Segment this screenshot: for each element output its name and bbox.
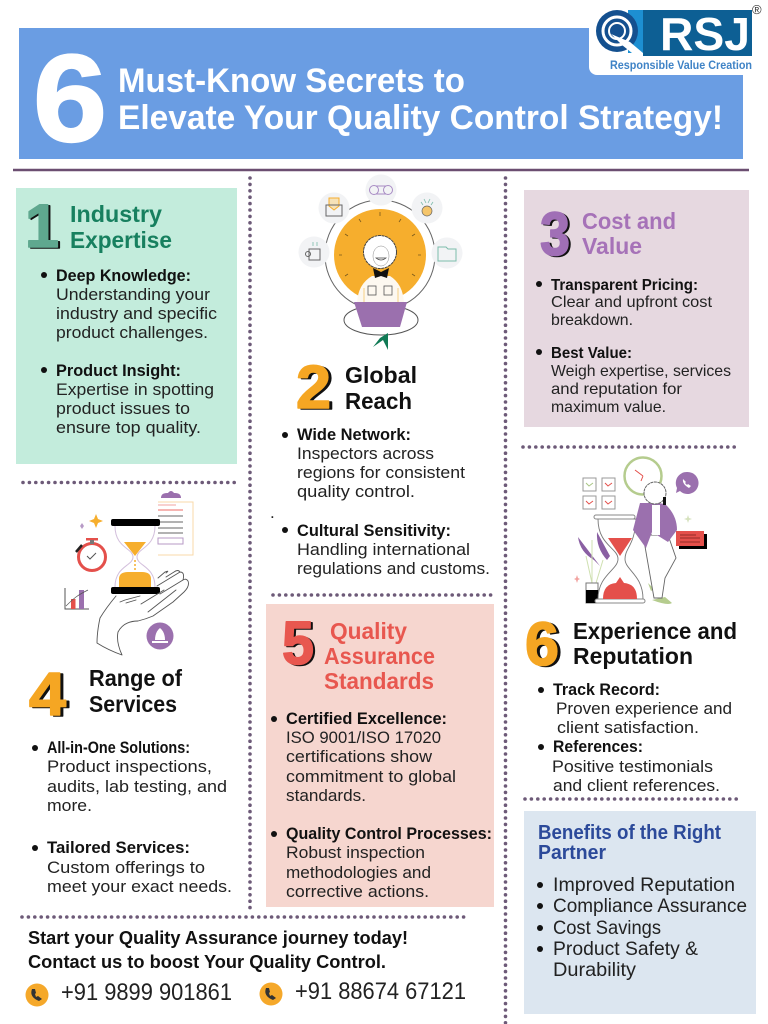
phone number 1: +91 9899 901861 <box>61 979 232 1006</box>
bullet list: methodologies and <box>286 863 431 882</box>
heading: benefits: Benefits of the Right <box>538 822 721 844</box>
benefits list: Product Safety & <box>553 938 698 960</box>
logo: RSJ: RSJ <box>660 8 750 60</box>
bullet list: Robust inspection <box>286 843 425 862</box>
logo: RSJ <box>589 2 768 75</box>
bullet list: industry and specific <box>56 304 218 323</box>
heading: cost and value <box>582 208 676 259</box>
bullet list: ISO 9001/ISO 17020 <box>286 728 441 747</box>
illustration: hourglass on open hand <box>65 491 193 655</box>
heading: cost and value: Value <box>582 233 642 259</box>
bullet list: more. <box>47 796 92 815</box>
title <box>118 62 723 137</box>
bullet list: Positive testimonials <box>552 757 713 776</box>
icon: phone 2 <box>260 982 282 1006</box>
bullet list: Proven experience and <box>556 699 732 718</box>
title: Elevate Your Quality Control Strategy! <box>118 99 723 137</box>
heading: industry expertise <box>70 201 172 253</box>
heading: global reach <box>345 362 417 414</box>
benefits list: Improved Reputation <box>553 874 735 896</box>
benefits list: Compliance Assurance <box>553 895 747 917</box>
benefits list: Durability <box>553 959 636 981</box>
heading: benefits: Partner <box>538 842 606 864</box>
bullet list: . <box>270 503 275 522</box>
heading: quality assurance standards: Quality <box>330 618 407 644</box>
bullet list: Certified Excellence: <box>286 710 447 728</box>
number 6: 6 <box>525 610 559 678</box>
benefits list: Cost Savings <box>553 917 661 939</box>
bullet list: Custom offerings to <box>47 858 205 877</box>
bullet list: maximum value. <box>551 399 666 416</box>
bullet list: breakdown. <box>551 312 633 329</box>
bullet list: References: <box>553 738 643 756</box>
heading: experience and reputation <box>573 618 737 669</box>
bullet list: standards. <box>286 786 366 805</box>
icon: phone 1 <box>26 984 48 1006</box>
number 6: 6 <box>528 611 562 679</box>
bullet list: client satisfaction. <box>557 718 699 737</box>
bullet list: Product inspections, <box>47 757 212 776</box>
header banner <box>19 28 743 168</box>
bullet list <box>32 739 232 896</box>
benefits list <box>537 874 747 981</box>
bullet list <box>271 710 492 901</box>
bullet list: Weigh expertise, services <box>551 363 731 380</box>
call to action text: Start your Quality Assurance journey today! <box>28 927 408 948</box>
heading: experience and reputation: Experience and <box>573 618 737 644</box>
bullet list: and reputation for <box>551 381 683 398</box>
bullet list: audits, lab testing, and <box>47 777 227 796</box>
bullet list: Inspectors across <box>297 444 434 463</box>
bullet list: product issues to <box>56 399 190 418</box>
number 4: 4 <box>29 660 66 728</box>
bullet list <box>536 277 731 416</box>
bullet list: ensure top quality. <box>56 418 201 437</box>
heading: quality assurance standards: Assurance <box>324 643 435 669</box>
panel: 2 global reach <box>270 353 490 578</box>
phone number 2: +91 88674 67121 <box>295 978 466 1005</box>
bullet list: Quality Control Processes: <box>286 825 492 843</box>
bullet list: Cultural Sensitivity: <box>297 522 451 540</box>
bullet list: Track Record: <box>553 681 660 699</box>
panel: benefits of the right partner <box>524 811 756 1014</box>
heading: experience and reputation: Reputation <box>573 643 693 669</box>
panel: 1 industry expertise <box>16 188 237 464</box>
illustration: person on phone beside hourglass <box>574 458 707 604</box>
heading: range of services: Range of <box>89 665 182 691</box>
number 4: 4 <box>32 661 69 729</box>
number 5: 5 <box>284 610 316 678</box>
bullet list: quality control. <box>297 482 415 501</box>
bullet list <box>41 267 218 437</box>
heading: benefits <box>538 822 721 864</box>
number 1: 1 <box>25 192 59 260</box>
logo: RSJ: Responsible Value Creation <box>610 60 752 72</box>
bullet list <box>270 426 490 578</box>
number 5: 5 <box>282 609 314 677</box>
bullet list: Handling international <box>297 540 470 559</box>
bullet list: regions for consistent <box>297 463 465 482</box>
bullet list: Tailored Services: <box>47 839 190 857</box>
bullet list: Clear and upfront cost <box>551 294 713 311</box>
logo: RSJ: ® <box>752 2 762 17</box>
panel: 5 quality assurance standards <box>266 604 494 907</box>
bullet list: product challenges. <box>56 323 208 342</box>
heading: global reach: Global <box>345 362 417 388</box>
bullet list: commitment to global <box>286 767 456 786</box>
bullet list: corrective actions. <box>286 882 429 901</box>
illustration: person with laptop and sun clock <box>298 174 462 350</box>
call to action text <box>28 927 408 972</box>
bullet list: Deep Knowledge: <box>56 267 191 285</box>
bullet list: regulations and customs. <box>297 559 490 578</box>
heading: quality assurance standards <box>324 618 435 694</box>
number 2: 2 <box>296 353 331 421</box>
heading: industry expertise: Industry <box>70 201 162 227</box>
panel: 4 range of services <box>29 660 232 896</box>
heading: range of services: Services <box>89 691 177 717</box>
title: Must-Know Secrets to <box>118 62 465 100</box>
number 1: 1 <box>27 193 61 261</box>
heading: cost and value: Cost and <box>582 208 676 234</box>
panel: 3 cost and value <box>524 190 749 427</box>
bullet list: Expertise in spotting <box>56 380 214 399</box>
bullet list: Transparent Pricing: <box>551 277 698 294</box>
heading: industry expertise: Expertise <box>70 227 172 253</box>
number 3: 3 <box>540 200 570 268</box>
bullet list: All-in-One Solutions: <box>47 739 190 757</box>
panel: 6 experience and reputation <box>525 610 737 795</box>
bullet list: meet your exact needs. <box>47 877 232 896</box>
bullet list: certifications show <box>286 747 433 766</box>
bullet list: and client references. <box>553 776 720 795</box>
heading: range of services <box>89 665 182 717</box>
number 2: 2 <box>299 354 334 422</box>
call to action text: Contact us to boost Your Quality Control. <box>28 951 386 972</box>
heading: quality assurance standards: Standards <box>324 668 434 694</box>
bullet list <box>538 681 732 795</box>
bullet list: Understanding your <box>56 285 210 304</box>
big number 6: 6 <box>33 30 107 168</box>
heading: global reach: Reach <box>345 388 412 414</box>
bullet list: Wide Network: <box>297 426 411 444</box>
bullet list: Best Value: <box>551 345 632 362</box>
number 3: 3 <box>542 201 572 269</box>
bullet list: Product Insight: <box>56 362 181 380</box>
